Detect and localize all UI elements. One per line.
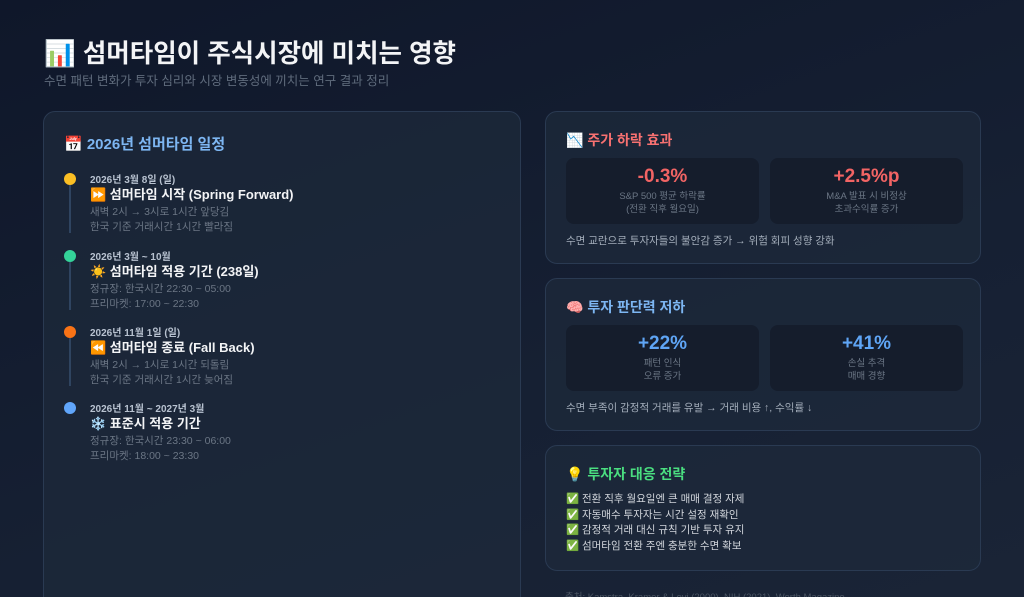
timeline item 4: 프리마켓: 18:00 ~ 23:30 [90, 450, 199, 462]
timeline item 4: 정규장: 한국시간 23:30 ~ 06:00 [90, 435, 231, 447]
timeline item 4: ❄️ 표준시 적용 기간 [90, 416, 201, 431]
timeline item 2: 2026년 3월 ~ 10월 [90, 252, 171, 263]
stat: -0.3%: (전환 직후 월요일) [626, 204, 699, 215]
stat: +22% [566, 325, 759, 391]
checklist: ✅ 섬머타임 전환 주엔 충분한 수면 확보 [566, 540, 741, 552]
timeline item 3 [64, 326, 255, 386]
stat: +41%: 손실 추격 [848, 358, 885, 369]
timeline item 1: 2026년 3월 8일 (일) [90, 175, 175, 186]
panel: judgment [545, 278, 981, 431]
note: 수면 부족이 감정적 거래를 유발 → 거래 비용 ↑, 수익률 ↓ [566, 402, 812, 414]
heading: 📉 주가 하락 효과 [566, 132, 672, 148]
timeline item 3: 2026년 11월 1일 (일) [90, 328, 180, 339]
heading: 🧠 투자 판단력 저하 [566, 299, 685, 315]
checklist: ✅ 감정적 거래 대신 규칙 기반 투자 유지 [566, 524, 744, 536]
timeline item 3: 한국 기준 거래시간 1시간 늦어짐 [90, 374, 233, 386]
title: 📊 섬머타임이 주식시장에 미치는 영향 [44, 40, 456, 68]
timeline item 2: 정규장: 한국시간 22:30 ~ 05:00 [90, 283, 231, 295]
panel: price drop [545, 111, 981, 264]
timeline item 1: 새벽 2시 → 3시로 1시간 앞당김 [90, 206, 229, 218]
subtitle: 수면 패턴 변화가 투자 심리와 시장 변동성에 끼치는 연구 결과 정리 [44, 74, 389, 88]
note: 수면 교란으로 투자자들의 불안감 증가 → 위험 회피 성향 강화 [566, 235, 835, 247]
timeline item 2: ☀️ 섬머타임 적용 기간 (238일) [90, 264, 259, 279]
stat: +2.5%p: 초과수익률 증가 [835, 204, 898, 215]
checklist: ✅ 전환 직후 월요일엔 큰 매매 결정 자제 [566, 493, 744, 505]
heading: schedule: 📅 2026년 섬머타임 일정 [64, 136, 225, 153]
stat: +22%: +22% [638, 333, 687, 354]
timeline item 3: ⏪ 섬머타임 종료 (Fall Back) [90, 340, 255, 355]
panel: schedule [43, 111, 521, 597]
stat: +2.5%p: +2.5%p [833, 166, 900, 187]
heading: 💡 투자자 대응 전략 [566, 466, 685, 482]
timeline item 1: 한국 기준 거래시간 1시간 빨라짐 [90, 221, 233, 233]
checklist: ✅ 자동매수 투자자는 시간 설정 재확인 [566, 508, 739, 520]
timeline item 4 [64, 402, 231, 462]
timeline item 2 [64, 250, 259, 310]
stat: -0.3%: S&P 500 평균 하락률 [619, 191, 706, 202]
stat: +2.5%p: M&A 발표 시 비정상 [826, 191, 907, 202]
stat: +41% [770, 325, 963, 391]
stat: +41%: +41% [842, 333, 891, 354]
checklist [566, 492, 744, 552]
stat: -0.3% [566, 158, 759, 224]
stat: +2.5%p [770, 158, 963, 224]
timeline item 1 [64, 173, 294, 233]
timeline item 4: 2026년 11월 ~ 2027년 3월 [90, 404, 204, 415]
stat: -0.3%: -0.3% [638, 166, 687, 187]
timeline item 2: 프리마켓: 17:00 ~ 22:30 [90, 298, 199, 310]
timeline item 1: ⏩ 섬머타임 시작 (Spring Forward) [90, 187, 294, 202]
stat: +41%: 매매 경향 [848, 371, 885, 382]
stat: +22%: 패턴 인식 [644, 358, 681, 369]
stat: +22%: 오류 증가 [644, 371, 681, 382]
timeline item 3: 새벽 2시 → 1시로 1시간 되돌림 [90, 359, 229, 371]
panel: strategy [545, 445, 981, 571]
